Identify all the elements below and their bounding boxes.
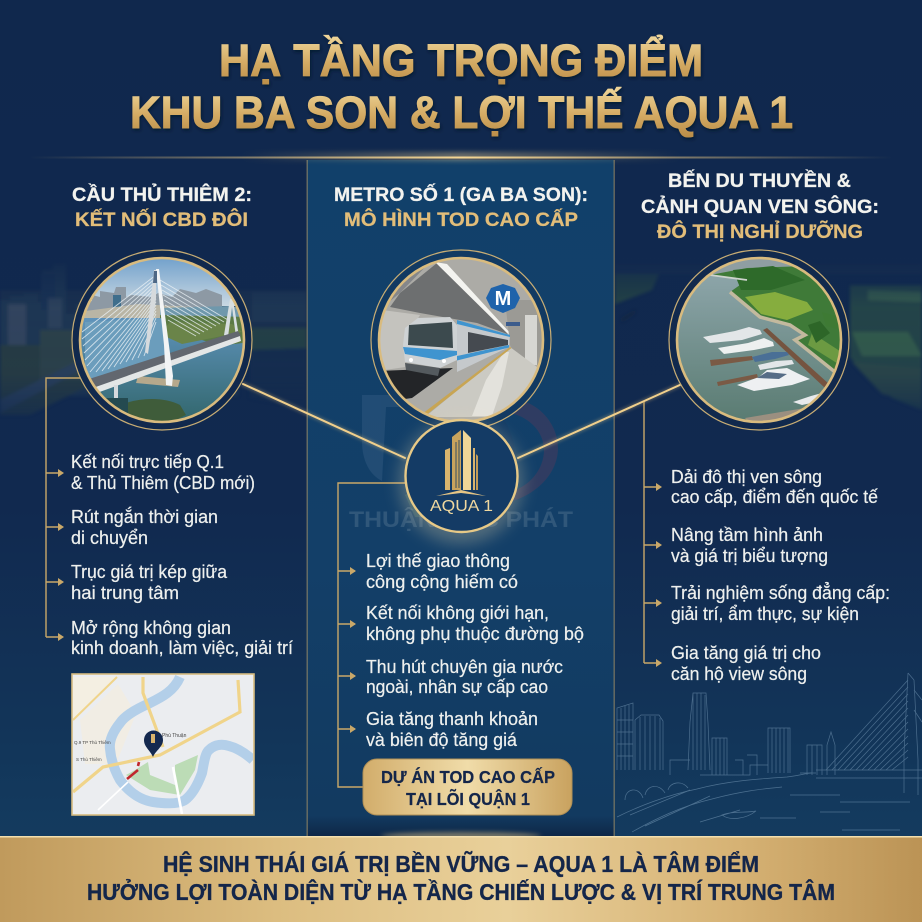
title divider glow (30, 152, 892, 161)
list: right column: và giá trị biểu tượng (671, 546, 828, 566)
list: centre column: không phụ thuộc đường bộ (366, 624, 584, 644)
location map: Q.9 TP Thủ Thiêm (74, 739, 111, 745)
photo circle: Metro Ba Son station (371, 250, 551, 430)
Aqua 1 hub: AQUA 1 (430, 498, 493, 515)
icon: metro M sign (486, 284, 520, 313)
gold column divider right (614, 160, 615, 836)
list: centre column: Kết nối không giới hạn, (366, 603, 549, 623)
heading: left column: KẾT NỐI CBD ĐÔI (75, 207, 248, 231)
list: left column: kinh doanh, làm việc, giải trí (71, 638, 293, 658)
location map: S Thủ Thiêm (76, 756, 102, 762)
list: left column: Kết nối trực tiếp Q.1 (71, 452, 224, 472)
location map (72, 674, 254, 815)
heading: right column: CẢNH QUAN VEN SÔNG: (641, 194, 879, 218)
heading: right column: ĐÔ THỊ NGHỈ DƯỠNG (657, 219, 863, 243)
heading: centre column: MÔ HÌNH TOD CAO CẤP (344, 207, 578, 231)
heading: right column: BẾN DU THUYỀN & (668, 169, 851, 192)
list: left column: Trục giá trị kép giữa (71, 562, 228, 582)
title: HẠ TẦNG TRỌNG ĐIỂM (219, 35, 703, 86)
panel: centre column (307, 160, 614, 836)
bracket: left list (46, 378, 82, 641)
list: left column: hai trung tâm (71, 583, 179, 603)
list: left column: di chuyển (71, 528, 148, 548)
list: right column: giải trí, ẩm thực, sự kiện (671, 604, 859, 624)
bracket: centre list (338, 483, 405, 787)
list: right column: Gia tăng giá trị cho (671, 643, 821, 663)
arrows (338, 571, 355, 729)
list: right column (671, 467, 890, 684)
list: right column: cao cấp, điểm đến quốc tế (671, 487, 878, 507)
icon: gold towers (436, 430, 486, 496)
list: centre column: Thu hút chuyên gia nước (366, 657, 563, 677)
list: left column: Mở rộng không gian (71, 618, 231, 638)
bracket: right list (644, 402, 662, 667)
list: centre column: và biên độ tăng giá (366, 730, 518, 750)
list: left column (71, 452, 293, 658)
heading: left column (72, 182, 252, 231)
heading: right column (641, 169, 879, 243)
list: right column: căn hộ view sông (671, 664, 807, 684)
map pin (144, 731, 163, 757)
list: centre column: Gia tăng thanh khoản (366, 709, 538, 729)
gold column divider left (306, 160, 308, 836)
footer banner: HƯỞNG LỢI TOÀN DIỆN TỪ HẠ TẦNG CHIẾN LƯỢC & VỊ TRÍ TRUNG TÂM (87, 877, 835, 905)
callout: TOD pill: TẠI LÕI QUẬN 1 (406, 788, 530, 809)
arrows (644, 487, 660, 663)
heading: centre column (334, 182, 588, 231)
photo circle: marina and riverside (669, 250, 849, 430)
title (130, 35, 793, 138)
list: centre column: Lợi thế giao thông (366, 551, 510, 571)
list: centre column (366, 551, 584, 750)
list: left column: & Thủ Thiêm (CBD mới) (71, 473, 255, 493)
title: KHU BA SON & LỢI THẾ AQUA 1 (130, 87, 793, 138)
location map: Phú Thuận (162, 733, 187, 739)
list: right column: Dải đô thị ven sông (671, 467, 822, 487)
footer banner: HỆ SINH THÁI GIÁ TRỊ BỀN VỮNG – AQUA 1 LÀ TÂM ĐIỂM (163, 850, 759, 877)
footer banner (0, 836, 922, 922)
connector lines to Aqua 1 (243, 384, 682, 458)
footer glow (381, 832, 541, 840)
heading: left column: CẦU THỦ THIÊM 2: (72, 182, 252, 206)
arrows (46, 473, 62, 637)
watermark logo (362, 395, 558, 520)
line-art skyline illustration (617, 673, 922, 832)
Aqua 1 hub (399, 420, 523, 544)
callout: TOD pill: DỰ ÁN TOD CAO CẤP (381, 766, 555, 787)
watermark text: THUẬN ĐỨC PHÁT (349, 507, 574, 532)
heading: centre column: METRO SỐ 1 (GA BA SON): (334, 182, 588, 206)
icon: metro M sign: M (495, 288, 511, 310)
background photo: riverside greenery right (615, 264, 922, 410)
background photo: city skyline left (0, 284, 306, 412)
photo circle: Thu Thiem 2 bridge (72, 250, 252, 430)
list: left column: Rút ngắn thời gian (71, 506, 218, 527)
list: right column: Trải nghiệm sống đẳng cấp: (671, 582, 890, 603)
list: centre column: ngoài, nhân sự cấp cao (366, 677, 548, 697)
list: right column: Nâng tầm hình ảnh (671, 525, 823, 545)
list: centre column: công cộng hiếm có (366, 572, 518, 592)
callout: TOD pill (363, 759, 572, 815)
